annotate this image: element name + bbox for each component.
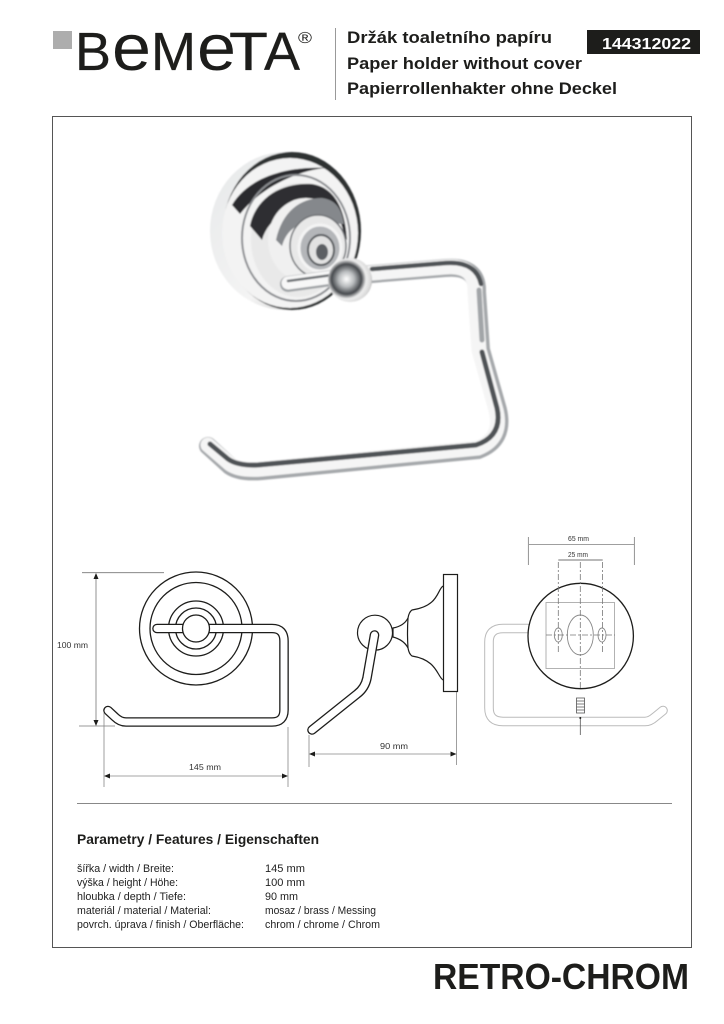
product code badge [587, 30, 700, 54]
stem rings [290, 215, 346, 277]
parameter labels: výška / height / Höhe: [77, 877, 178, 889]
side view drawing [312, 574, 458, 730]
logo: Bemeta: ® [298, 30, 312, 47]
product titles: Držák toaletního papíru [347, 28, 552, 47]
product titles [347, 28, 617, 98]
dimension: depth 90 mm [309, 692, 456, 767]
parameters heading: Parametry / Features / Eigenschaften [77, 831, 319, 847]
logo: Bemeta: B [75, 22, 111, 82]
logo: Bemeta: M [151, 22, 196, 82]
series name: RETRO-CHROM [433, 956, 689, 997]
dimension: 25 mm [558, 552, 603, 560]
dimension: 25 mm: 25 mm [568, 552, 588, 559]
wall plate [210, 152, 360, 310]
parameter labels: povrch. úprava / finish / Oberfläche: [77, 919, 244, 931]
parameter labels: šířka / width / Breite: [77, 863, 174, 875]
parameter labels: materiál / material / Material: [77, 905, 211, 917]
ball [328, 258, 372, 302]
rear view drawing with mounting holes [489, 562, 663, 735]
dimension: height 100 mm [57, 573, 164, 726]
logo: Bemeta: e [112, 11, 151, 84]
product photo: chrome paper holder [208, 152, 499, 471]
dome [268, 198, 344, 282]
parameter values: 145 mm [265, 863, 305, 875]
dimension: width 145 mm [104, 713, 288, 787]
parameter values: mosaz / brass / Messing [265, 905, 376, 917]
dimension: depth 90 mm: 90 mm [380, 741, 408, 751]
logo: Bemeta: e [197, 11, 236, 84]
parameter values: chrom / chrome / Chrom [265, 919, 380, 931]
product code badge: 144312022 [602, 36, 691, 53]
header divider [335, 28, 336, 100]
dimension: 65 mm: 65 mm [568, 536, 589, 543]
front view drawing [108, 572, 284, 722]
parameter labels [77, 863, 244, 931]
logo: Bemeta: A [264, 22, 300, 82]
product titles: Papierrollenhakter ohne Deckel [347, 79, 617, 98]
parameter values [265, 863, 380, 931]
section divider [77, 803, 672, 804]
wire arm [208, 263, 499, 471]
dimension: width 145 mm: 145 mm [189, 762, 221, 772]
dimension: height 100 mm: 100 mm [57, 640, 88, 650]
dimension: 65 mm [528, 536, 634, 565]
main frame [52, 116, 692, 948]
plate reflection [232, 168, 326, 214]
arm stub [288, 278, 332, 284]
parameter labels: hloubka / depth / Tiefe: [77, 891, 186, 903]
logo: Bemeta [53, 11, 312, 84]
product titles: Paper holder without cover [347, 54, 582, 73]
parameter values: 90 mm [265, 891, 298, 903]
parameter values: 100 mm [265, 877, 305, 889]
logo: Bemeta: T [229, 22, 268, 82]
